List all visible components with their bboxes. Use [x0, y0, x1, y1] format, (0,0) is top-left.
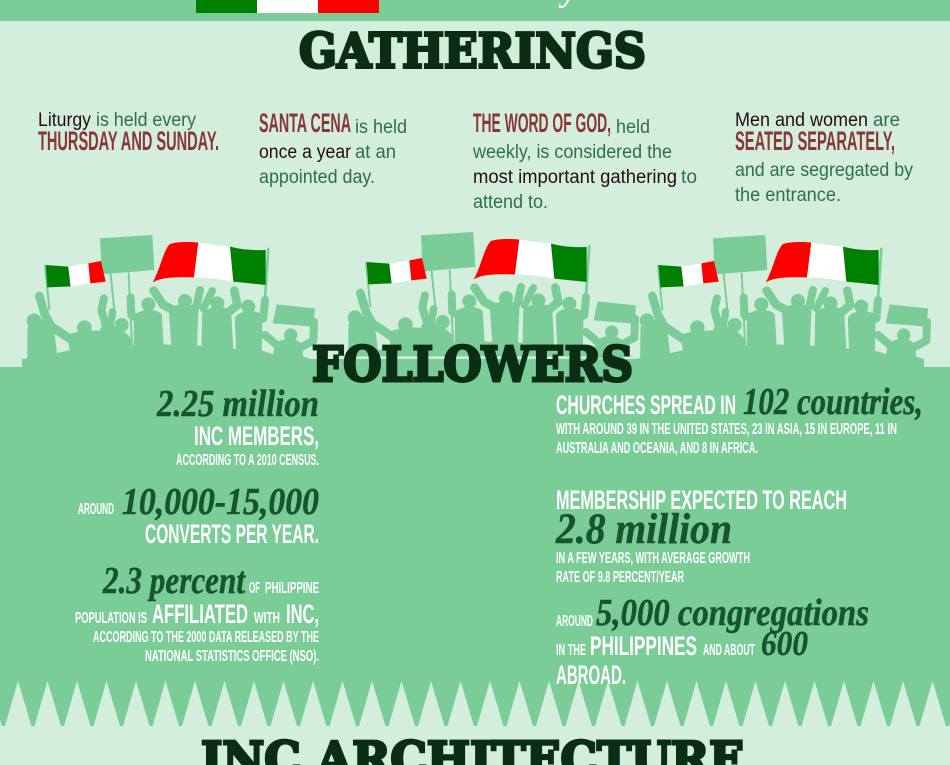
text block: the word of god: attend to.	[473, 192, 548, 213]
stat: 5,000 congregations: IN THE	[556, 642, 586, 659]
stat: converts per year: 10,000-15,000	[122, 481, 319, 523]
stat: converts per year: AROUND	[78, 501, 114, 518]
text block: the word of god: held	[616, 117, 650, 138]
stat: 2.25 million members: INC MEMBERS,	[194, 421, 319, 451]
text block: liturgy: is held every	[96, 110, 196, 131]
illustration: crowd with flags, left	[20, 235, 315, 360]
text block: seating: the entrance.	[735, 185, 841, 206]
zigzag divider	[0, 681, 950, 726]
text block: santa cena: is held	[355, 117, 407, 138]
stat: 102 countries: CHURCHES SPREAD IN	[556, 390, 736, 420]
text block: santa cena: at an	[355, 142, 396, 163]
top banner band	[0, 0, 950, 21]
stat: 2.3 percent affiliated: WITH	[254, 610, 280, 627]
text block: santa cena: appointed day.	[259, 167, 375, 188]
stat: 5,000 congregations: 5,000 congregations	[596, 592, 869, 634]
stat: 2.25 million members	[156, 383, 319, 469]
heading: gatherings: GATHERINGS	[299, 24, 646, 80]
stat: 2.25 million members: ACCORDING TO A 2010 CENSUS.	[176, 452, 319, 469]
text block: seating: and are segregated by	[735, 160, 913, 181]
stat: 2.3 percent affiliated: ACCORDING TO THE 2000 DATA RELEASED BY THE	[93, 629, 319, 646]
stat: 5,000 congregations	[556, 592, 869, 690]
text block: the word of god: most important gathering	[473, 167, 677, 188]
text block: seating: Men and women	[735, 110, 868, 131]
stat: 2.3 percent affiliated: OF	[249, 580, 260, 597]
stat: 2.3 percent affiliated: 2.3 percent	[102, 560, 246, 602]
text block: liturgy: Liturgy	[38, 110, 91, 131]
text block: the word of god: to	[681, 167, 697, 188]
text block: the word of god	[472, 108, 697, 213]
text block: santa cena	[259, 108, 407, 188]
panel: followers background	[0, 359, 950, 726]
illustration: crowd with flags, right	[633, 235, 928, 360]
stat: 5,000 congregations: AROUND	[556, 613, 593, 630]
stat: 2.3 percent affiliated: AFFILIATED	[152, 599, 248, 629]
stat: 2.8 million expected: 2.8 million	[555, 506, 732, 553]
stat: 5,000 congregations: AND ABOUT	[703, 642, 755, 659]
text block: santa cena: once a year	[259, 142, 352, 163]
stat: 2.3 percent affiliated: PHILIPPINE	[265, 580, 319, 597]
illustration: crowd with flags, centre	[341, 232, 636, 357]
stat: 102 countries	[556, 381, 923, 457]
stat: 5,000 congregations: PHILIPPINES	[590, 631, 697, 661]
text block: seating: are	[873, 110, 900, 131]
stat: 102 countries: AUSTRALIA AND OCEANIA, AND 8 IN AFRICA.	[556, 440, 758, 457]
text block: the word of god: weekly, is considered the	[472, 142, 672, 163]
stat: 2.3 percent affiliated: POPULATION IS	[75, 610, 147, 627]
stat: 2.25 million members: 2.25 million	[156, 383, 319, 425]
text block: liturgy: THURSDAY AND SUNDAY.	[38, 126, 219, 156]
stat: converts per year	[78, 481, 319, 549]
stat: converts per year: CONVERTS PER YEAR.	[145, 519, 319, 549]
stat: 5,000 congregations: 600	[761, 624, 808, 663]
text block: santa cena: SANTA CENA	[259, 108, 351, 138]
stat: 2.8 million expected: RATE OF 9.8 PERCENT/YEAR	[556, 569, 684, 586]
stat: 5,000 congregations: ABROAD.	[556, 660, 626, 690]
stat: 2.8 million expected: IN A FEW YEARS, WITH AVERAGE GROWTH	[556, 550, 750, 567]
stat: 2.3 percent affiliated	[75, 560, 319, 665]
banner flag	[196, 0, 379, 13]
stat: 2.8 million expected	[555, 485, 847, 586]
text block: liturgy	[38, 110, 219, 156]
text block: seating	[735, 110, 913, 206]
text block: the word of god: THE WORD OF GOD,	[473, 108, 611, 138]
stat: 2.3 percent affiliated: INC,	[286, 599, 319, 629]
heading: followers: FOLLOWERS	[312, 337, 633, 393]
stat: 2.3 percent affiliated: NATIONAL STATISTICS OFFICE (NSO).	[145, 648, 319, 665]
